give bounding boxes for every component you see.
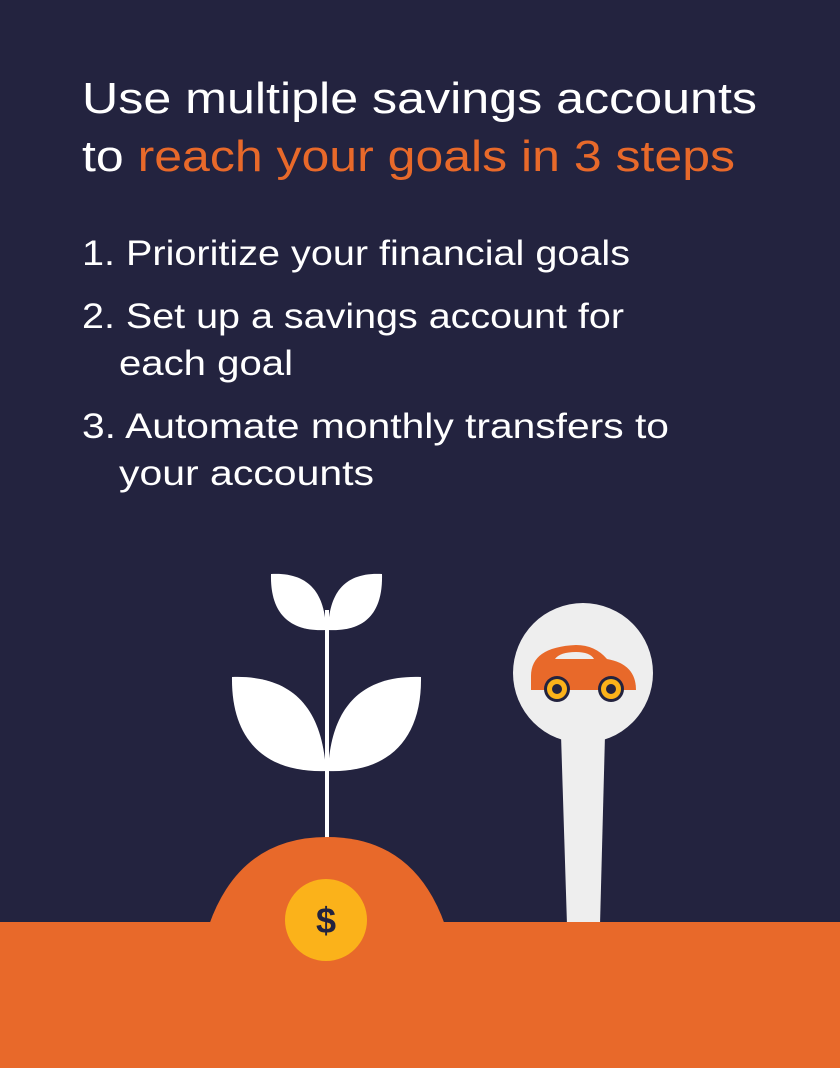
ground with mound xyxy=(0,837,840,1068)
step 2: each goal xyxy=(119,344,293,383)
icon: dollar coin xyxy=(285,879,367,961)
title: Use multiple savings accounts xyxy=(82,74,757,123)
step 3: 3. Automate monthly transfers to xyxy=(82,407,669,446)
title: to reach your goals in 3 steps xyxy=(82,132,735,181)
sign post with car xyxy=(513,603,653,925)
step 2: 2. Set up a savings account for xyxy=(82,297,624,336)
icon: car xyxy=(531,645,636,702)
steps list xyxy=(82,234,669,493)
step 3: your accounts xyxy=(119,454,374,493)
step 3 xyxy=(82,407,669,493)
step 1: 1. Prioritize your financial goals xyxy=(82,234,630,273)
icon: dollar coin: $ xyxy=(316,900,336,941)
title xyxy=(82,74,757,181)
step 2 xyxy=(82,297,624,383)
plant xyxy=(232,574,421,840)
